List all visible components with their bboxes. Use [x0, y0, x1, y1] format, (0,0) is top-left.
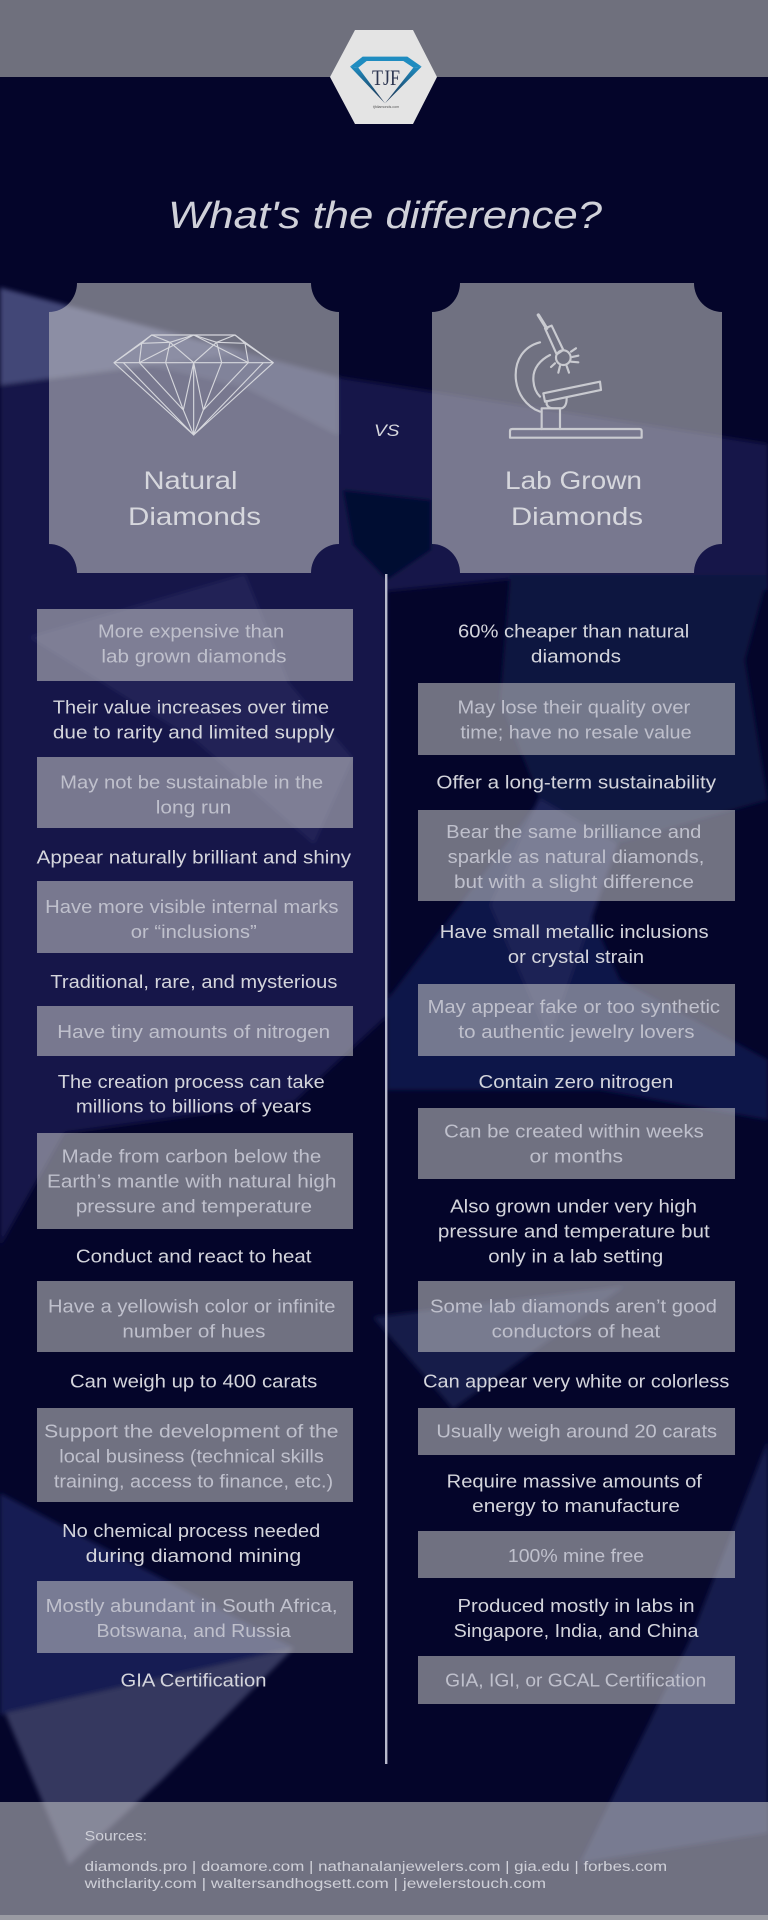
fact: creation time: The creation process can take: [58, 1072, 325, 1092]
fact: price: 60% cheaper than natural: [458, 622, 689, 642]
fact: mine free: [418, 1531, 735, 1578]
fact: brilliance: but with a slight difference: [454, 872, 694, 892]
fact: energy: Require massive amounts of: [447, 1471, 703, 1491]
fact: inclusions: Have small metallic inclusions: [440, 922, 709, 942]
fact: sustainability: May not be sustainable in the: [60, 772, 323, 792]
heading: natural diamonds: Diamonds: [128, 503, 261, 531]
fact: value: time; have no resale value: [460, 722, 692, 742]
fact: brilliance: [418, 810, 735, 901]
fact: chemical process: during diamond mining: [86, 1546, 301, 1566]
fact: heat: [418, 1281, 735, 1352]
fact: origin: only in a lab setting: [488, 1246, 663, 1266]
panel: natural diamonds: [49, 283, 339, 573]
fact: local business: local business (technical skills: [59, 1446, 324, 1466]
fact: weight: Can weigh up to 400 carats: [70, 1371, 317, 1391]
fact: price: [458, 622, 689, 667]
fact: color: Can appear very white or colorless: [423, 1371, 729, 1391]
fact: price: More expensive than: [98, 622, 284, 642]
fact: certification: GIA, IGI, or GCAL Certification: [445, 1671, 706, 1691]
fact: origin: [37, 1133, 353, 1229]
fact: chemical process: [62, 1521, 320, 1566]
fact: heat: Conduct and react to heat: [76, 1246, 312, 1266]
fact: brilliance: Bear the same brilliance and: [446, 822, 701, 842]
fact: origin: pressure and temperature but: [438, 1222, 710, 1242]
sources text: Sources:: [85, 1829, 147, 1844]
fact: nitrogen: Have tiny amounts of nitrogen: [57, 1022, 330, 1042]
logo: TJF hexagon badge: [330, 30, 437, 124]
fact: color: Have a yellowish color or infinite: [48, 1296, 336, 1316]
fact: inclusions: [440, 922, 709, 967]
vs label: VS: [374, 421, 400, 440]
fact: weight: Usually weigh around 20 carats: [436, 1421, 717, 1441]
logo: TJF hexagon badge: tjfdiamonds.com: [373, 105, 399, 109]
heading: lab grown diamonds: Diamonds: [511, 503, 643, 531]
fact: creation time: Can be created within weeks: [444, 1122, 704, 1142]
fact: local business: [37, 1408, 353, 1502]
fact: price: [37, 609, 353, 681]
heading: lab grown diamonds: [505, 467, 643, 531]
fact: inclusions: or crystal strain: [508, 947, 644, 967]
fact: location: Singapore, India, and China: [454, 1621, 700, 1641]
fact: character: May appear fake or too synthetic: [428, 997, 720, 1017]
fact: location: Mostly abundant in South Africa,: [46, 1596, 337, 1616]
fact: value: due to rarity and limited supply: [53, 722, 335, 742]
icon: microscope: [510, 315, 642, 438]
fact: origin: pressure and temperature: [76, 1197, 312, 1217]
fact: origin: Made from carbon below the: [62, 1147, 321, 1167]
sources text: [83, 1829, 667, 1891]
fact: chemical process: No chemical process needed: [62, 1521, 320, 1541]
fact: creation time: or months: [530, 1147, 623, 1167]
logo: TJF hexagon badge: TJF: [372, 65, 400, 90]
fact: inclusions: [37, 881, 353, 953]
fact: price: lab grown diamonds: [101, 647, 287, 667]
heading: natural diamonds: Natural: [144, 467, 238, 495]
fact: inclusions: Have more visible internal marks: [45, 897, 338, 917]
sources text: withclarity.com | waltersandhogsett.com | jewelerstouch.com: [83, 1876, 546, 1891]
top band: [0, 0, 768, 77]
fact: value: [418, 683, 735, 755]
fact: certification: [418, 1656, 735, 1704]
fact: nitrogen: Contain zero nitrogen: [478, 1072, 673, 1092]
center divider line: [385, 574, 387, 1764]
fact: character: to authentic jewelry lovers: [458, 1022, 694, 1042]
fact: sustainability: [37, 757, 353, 828]
fact: energy: energy to manufacture: [472, 1496, 680, 1516]
title: What's the difference?: [168, 195, 603, 237]
fact: mine free: 100% mine free: [508, 1546, 644, 1566]
icon: blue diamond: [350, 57, 422, 103]
fact: sustainability: long run: [156, 797, 231, 817]
sources text: diamonds.pro | doamore.com | nathanalanjewelers.com | gia.edu | forbes.com: [85, 1859, 667, 1874]
fact: nitrogen: [37, 1006, 353, 1056]
fact: price: diamonds: [531, 647, 621, 667]
fact: weight: [418, 1408, 735, 1455]
fact: location: Produced mostly in labs in: [458, 1596, 695, 1616]
fact: creation time: millions to billions of years: [76, 1097, 312, 1117]
panel: sources footer: [0, 1802, 768, 1920]
fact: heat: Some lab diamonds aren’t good: [430, 1296, 717, 1316]
fact: character: [418, 984, 735, 1056]
fact: location: [37, 1581, 353, 1653]
fact: certification: GIA Certification: [120, 1671, 266, 1691]
fact: origin: Also grown under very high: [450, 1197, 697, 1217]
fact: sustainability: Offer a long-term sustainability: [436, 772, 716, 792]
fact: value: [53, 697, 335, 742]
fact: local business: Support the development of the: [44, 1421, 338, 1441]
fact: heat: conductors of heat: [492, 1321, 660, 1341]
fact: character: Traditional, rare, and mysterious: [50, 972, 337, 992]
fact: energy: [447, 1471, 703, 1516]
fact: brilliance: sparkle as natural diamonds,: [448, 847, 704, 867]
fact: value: May lose their quality over: [458, 697, 690, 717]
fact: origin: Earth’s mantle with natural high: [47, 1172, 336, 1192]
column: lab grown diamonds facts: [418, 622, 735, 1704]
fact: color: number of hues: [122, 1321, 265, 1341]
fact: location: Botswana, and Russia: [96, 1621, 292, 1641]
fact: creation time: [58, 1072, 325, 1117]
heading: natural diamonds: [128, 467, 261, 531]
column: natural diamonds facts: [37, 609, 353, 1691]
icon: diamond outline: [114, 335, 273, 435]
panel: lab grown diamonds: [432, 283, 722, 573]
heading: lab grown diamonds: Lab Grown: [505, 467, 642, 495]
fact: color: [37, 1281, 353, 1352]
fact: origin: [438, 1197, 710, 1266]
fact: value: Their value increases over time: [53, 697, 329, 717]
fact: creation time: [418, 1108, 735, 1179]
fact: inclusions: or “inclusions”: [131, 922, 257, 942]
fact: brilliance: Appear naturally brilliant and shiny: [37, 847, 351, 867]
fact: location: [454, 1596, 700, 1641]
fact: local business: training, access to finance, etc.): [54, 1471, 333, 1491]
